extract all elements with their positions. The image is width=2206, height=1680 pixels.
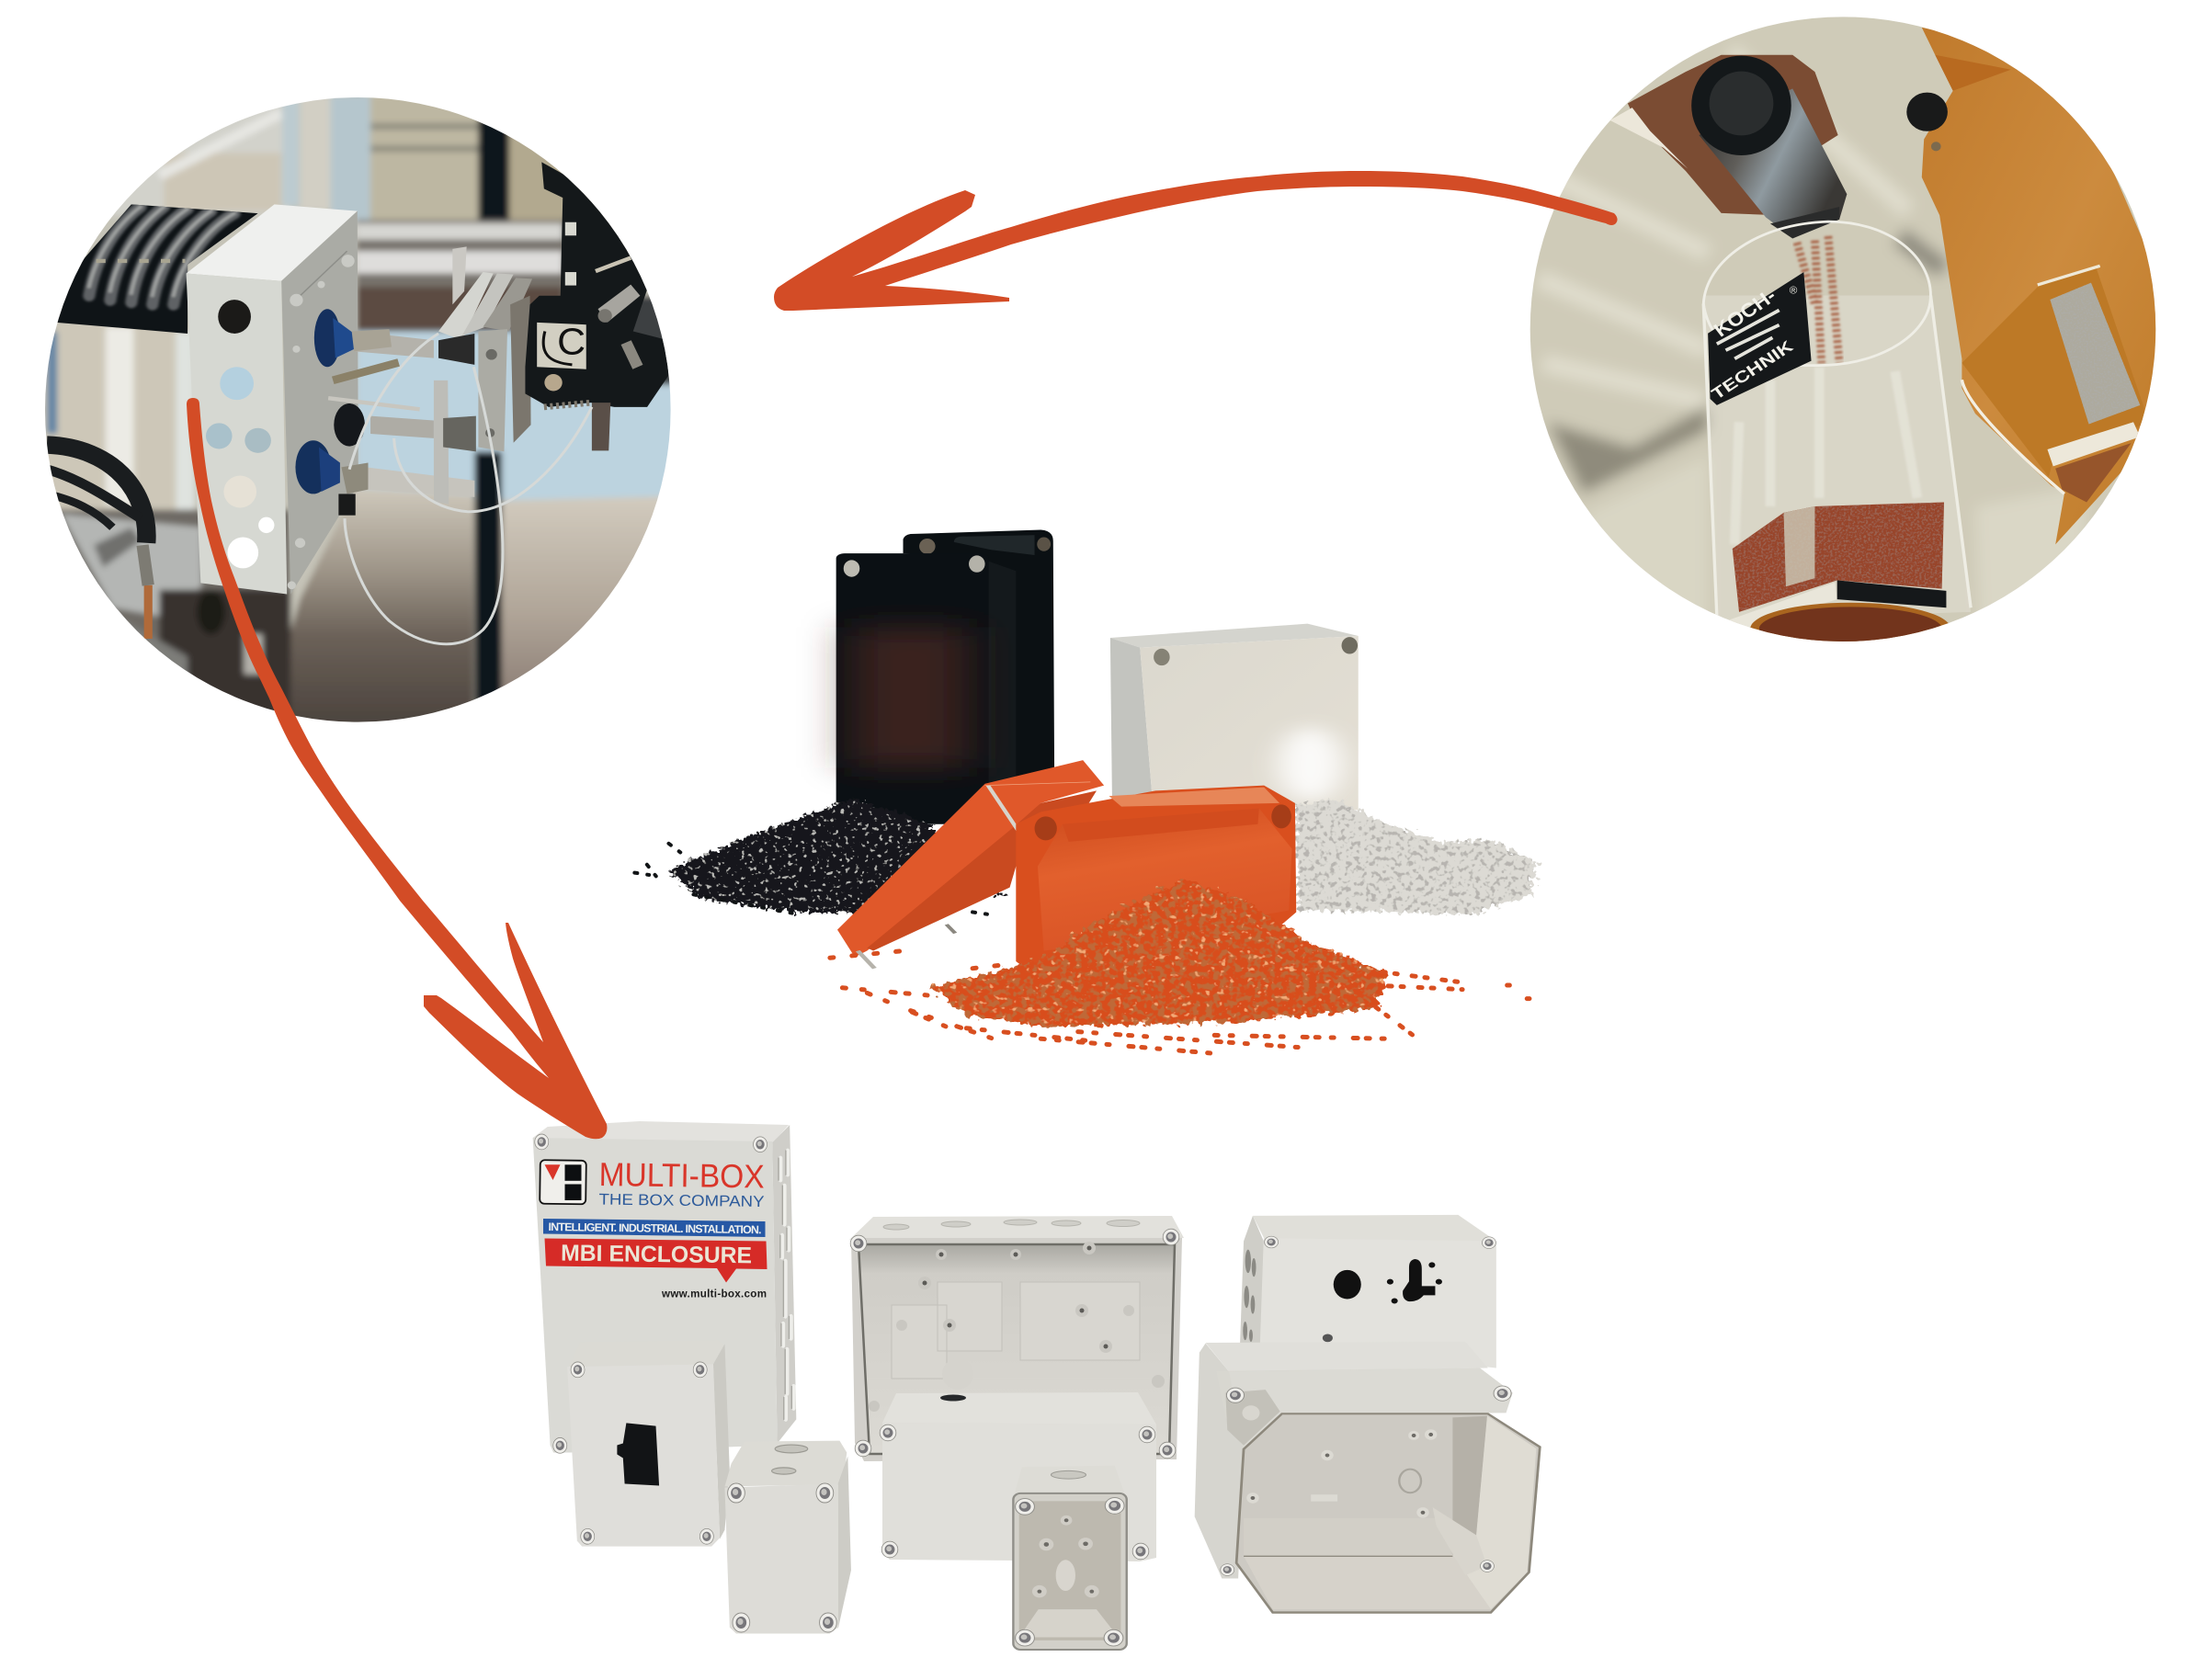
white enclosure being gripped: [187, 204, 358, 594]
brand label: TECHNIK: [1708, 337, 1796, 403]
coloured enclosures with matching granulate: [634, 529, 1537, 1054]
company name: MULTI-BOX: [598, 1155, 765, 1196]
arrow: injection moulding to finished enclosures: [187, 398, 607, 1139]
ribbed black coil: [57, 204, 257, 334]
product range of grey and clear enclosures: [533, 1121, 1540, 1650]
blurred ceiling background: [1517, 5, 2171, 654]
orange granulate pile: [830, 879, 1529, 1054]
blue banner: INTELLIGENT. INDUSTRIAL. INSTALLATION.: [548, 1220, 762, 1236]
brand label: [1708, 272, 1812, 405]
orange open enclosure: [1016, 786, 1296, 975]
black actuator with C plate: C: [557, 321, 586, 362]
blurred machine background: [38, 91, 680, 732]
orange dosing unit: [1906, 28, 2166, 544]
company tagline: THE BOX COMPANY: [598, 1191, 765, 1210]
blue suction cups and rods: [295, 309, 474, 516]
red banner: [544, 1239, 767, 1283]
large clear-lid enclosure: [1195, 1342, 1540, 1613]
arrow: hopper to injection moulding: [774, 171, 1618, 311]
white enclosure: [1110, 624, 1359, 810]
photo circle: robot handling an enclosure: [38, 91, 680, 732]
large MULTI-BOX labelled enclosure: [533, 1121, 796, 1453]
small clear-lid enclosure: [1013, 1466, 1127, 1650]
hand holding the sample bottle: [1609, 55, 1847, 238]
grey closed enclosure, centre: [880, 1392, 1156, 1561]
grey enclosure with cut-outs, back right: [1240, 1215, 1496, 1368]
photo circle: granulate poured into a hopper: [1517, 5, 2171, 655]
website: www.multi-box.com: [661, 1288, 767, 1300]
red banner: MBI ENCLOSURE: [561, 1241, 752, 1268]
white granulate pile: [1294, 798, 1537, 914]
black enclosures: [836, 529, 1054, 824]
orange lid: [837, 760, 1104, 969]
black actuator with C plate: [525, 162, 668, 450]
push-button enclosure: [567, 1340, 730, 1547]
black granulate pile: [634, 798, 1004, 915]
gripper aluminium profiles: [434, 246, 532, 505]
brand label: ®: [1790, 286, 1798, 297]
black hose and cables: [47, 445, 148, 639]
open grey enclosure, back centre: [849, 1216, 1184, 1461]
brand label: KOCH-: [1710, 284, 1780, 341]
MULTI-BOX logo mark: [540, 1160, 586, 1204]
pneumatic tubes: [345, 334, 592, 644]
small grey enclosure: [724, 1441, 851, 1634]
clear sample cylinder with granulate: [1703, 221, 1971, 655]
